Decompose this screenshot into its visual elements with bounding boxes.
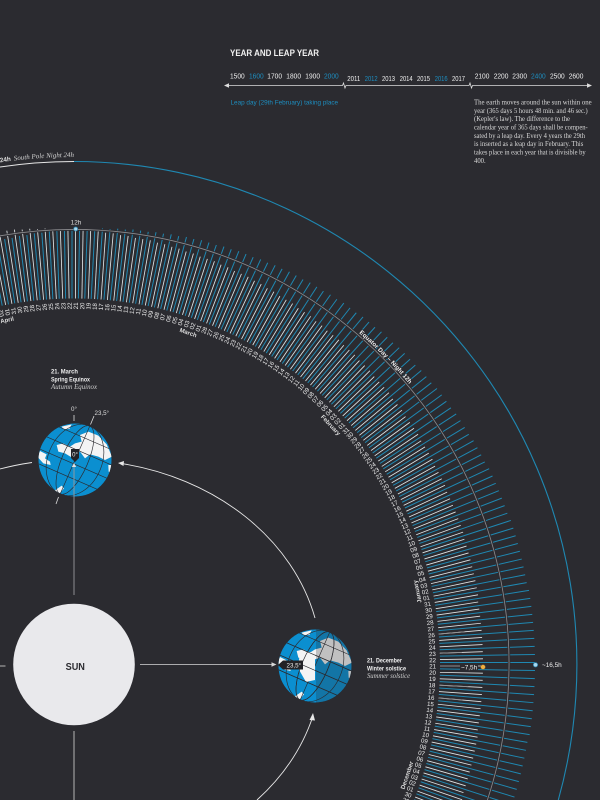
day and night length bars with date labels: 03: [329, 412, 339, 422]
day and night length bars with date labels: 16: [104, 303, 112, 311]
March caption: Autumn Equinox: [50, 383, 98, 391]
March caption: 21. March: [51, 368, 78, 376]
explanatory paragraph: calendar year of 365 days shall be compen-: [474, 124, 588, 132]
day and night length bars with date labels: 03: [183, 319, 192, 329]
day and night length bars with date labels: 05: [171, 316, 180, 325]
day and night length bars with date labels: 10: [422, 731, 430, 740]
day and night length bars with date labels: 21: [429, 664, 437, 670]
December caption: Winter solstice: [367, 665, 406, 672]
day and night length bars with date labels: 20: [245, 347, 255, 357]
day and night length bars with date labels: 12: [129, 306, 137, 315]
centuries left: 1700: [267, 74, 282, 80]
day and night length bars with date labels: [0, 228, 535, 800]
centuries left: 1900: [305, 74, 320, 80]
equator ring with label: [0, 228, 510, 800]
extra land on day side: [298, 652, 315, 682]
day and night length bars with date labels: 14: [116, 304, 124, 313]
day and night length bars with date labels: 20: [79, 302, 86, 309]
day and night length bars with date labels: 01: [337, 421, 347, 431]
month labels: April: [0, 317, 15, 325]
day and night length bars with date labels: 09: [410, 546, 419, 555]
day and night length bars with date labels: 26: [212, 330, 221, 340]
timeline arrow: [224, 83, 592, 88]
explanatory paragraph: [474, 98, 592, 165]
centuries right: 2400: [531, 74, 546, 80]
day and night length bars with date labels: 24: [54, 302, 61, 310]
day and night length bars with date labels: 23: [429, 651, 437, 658]
years middle: 2017: [452, 76, 465, 83]
day and night length bars with date labels: 04: [418, 576, 427, 584]
day and night length bars with date labels: 30: [403, 791, 413, 800]
centuries right: 2600: [569, 74, 583, 80]
day and night length bars with date labels: 29: [426, 613, 434, 621]
day and night length bars with date labels: 23: [371, 466, 381, 476]
day and night length bars with date labels: 07: [413, 558, 423, 566]
day and night length bars with date labels: 21: [240, 344, 250, 354]
day and night length bars with date labels: 28: [426, 619, 435, 627]
day and night length bars with date labels: 06: [415, 564, 424, 572]
day and night length bars with date labels: 13: [122, 305, 130, 314]
month labels: [0, 317, 424, 790]
day and night length bars with date labels: 22: [234, 341, 244, 351]
December caption: 21. December: [367, 657, 402, 664]
day and night length bars with date labels: 27: [427, 626, 435, 633]
day and night length bars with date labels: 12: [424, 719, 432, 727]
day and night length bars with date labels: 06: [416, 755, 425, 764]
day and night length bars with date labels: 29: [349, 436, 360, 446]
day and night length bars with date labels: 22: [67, 302, 74, 309]
day and night length bars with date labels: 30: [16, 305, 24, 314]
day and night length bars with date labels: 11: [423, 725, 431, 733]
day and night length bars with date labels: 15: [427, 701, 435, 708]
orbit arrows: [0, 461, 315, 800]
day and night length bars with date labels: 05: [417, 570, 426, 578]
centuries right: [475, 74, 583, 80]
day and night length bars with date labels: 02: [189, 321, 198, 331]
day and night length bars with date labels: 30: [345, 431, 356, 441]
day and night length bars with date labels: 23: [229, 338, 238, 348]
sun rays and axes: [0, 662, 276, 800]
centuries left: [230, 74, 339, 80]
explanatory paragraph: 400.: [474, 157, 486, 165]
day and night length bars with date labels: 28: [353, 440, 363, 451]
day and night length bars with date labels: 13: [282, 371, 292, 381]
centuries left: 1600: [249, 74, 264, 80]
explanatory paragraph: is inserted as a leap day in February. This: [474, 140, 584, 148]
day and night length bars with date labels: 01: [423, 594, 431, 603]
day and night length bars with date labels: 18: [428, 682, 436, 689]
centuries right: 2200: [494, 74, 508, 80]
December caption: [367, 657, 410, 680]
day and night length bars with date labels: 22: [429, 657, 437, 664]
day and night length bars with date labels: 01: [195, 323, 204, 333]
years middle: 2015: [417, 76, 430, 83]
centuries left: 1500: [230, 74, 245, 80]
zero degree tag: 0°: [72, 452, 78, 458]
day and night length bars with date labels: 06: [165, 314, 174, 323]
day and night length bars with date labels: 17: [428, 688, 436, 696]
explanatory paragraph: takes place in each year that is divisible by: [474, 148, 586, 156]
equator ring with label: Equator Day – Night 12h: [358, 329, 412, 384]
day and night length bars with date labels: 18: [92, 302, 99, 310]
day and night length bars with date labels: 17: [390, 499, 400, 509]
day and night length bars with date labels: 04: [412, 767, 421, 776]
zero degree tag: [71, 449, 79, 467]
day and night length bars with date labels: 15: [396, 510, 405, 520]
day and night length bars with date labels: 10: [141, 308, 149, 317]
day and night length bars with date labels: 12: [403, 528, 412, 537]
day and night length bars with date labels: 01: [406, 785, 415, 794]
day and night length bars with date labels: 25: [364, 456, 374, 466]
years middle: 2013: [382, 76, 395, 83]
day and night length bars with date labels: 18: [256, 353, 266, 363]
day and night length bars with date labels: 16: [267, 360, 277, 370]
month labels: March: [179, 328, 198, 339]
day and night length bars with date labels: 03: [410, 773, 419, 782]
angle labels: [71, 406, 110, 417]
outer ring: polar day and night: [0, 152, 578, 800]
centuries left: 2000: [324, 74, 339, 80]
day and night length bars with date labels: 19: [251, 350, 261, 360]
day and night length bars with date labels: 26: [428, 632, 436, 640]
sun: SUN: [66, 662, 85, 673]
day and night length bars with date labels: 10: [297, 382, 307, 392]
explanatory paragraph: (Kepler's law). The difference to the: [474, 115, 570, 123]
day and night length bars with date labels: 16: [427, 694, 435, 702]
day and night length bars with date labels: 08: [153, 311, 161, 320]
heading: YEAR AND LEAP YEAR: [230, 48, 319, 58]
years middle: 2011: [347, 76, 360, 83]
day and night length bars with date labels: 19: [429, 676, 436, 683]
day and night length bars with date labels: 13: [401, 522, 410, 531]
day and night length bars with date labels: 21: [73, 302, 80, 309]
day and night length bars with date labels: 05: [320, 403, 330, 413]
day and night length bars with date labels: 11: [406, 534, 415, 543]
marker: shortest day: [460, 664, 485, 671]
day and night length bars with date labels: 23: [60, 302, 68, 310]
December caption: Summer solstice: [367, 672, 410, 680]
day and night length bars with date labels: 04: [324, 407, 335, 418]
centuries right: 2500: [550, 74, 565, 80]
day and night length bars with date labels: 31: [341, 426, 352, 436]
day and night length bars with date labels: 24: [368, 461, 378, 471]
day and night length bars with date labels: 02: [333, 416, 343, 427]
day and night length bars with date labels: 10: [407, 540, 417, 549]
day and night length bars with date labels: 08: [419, 743, 428, 752]
re-drawn grid over day side land: [278, 632, 351, 700]
sun ray to March earth: [73, 466, 75, 595]
years middle: 2012: [365, 76, 378, 83]
day and night length bars with date labels: 28: [200, 326, 210, 335]
day and night length bars with date labels: 08: [306, 390, 316, 400]
leap year timeline section: [224, 48, 592, 165]
years middle: 2016: [435, 76, 448, 83]
marker: 12h equinox: 12h: [71, 220, 82, 226]
explanatory paragraph: year (365 days 5 hours 48 min. and 46 sec.): [474, 107, 588, 115]
angle tag: 23,5°: [286, 662, 302, 669]
day and night length bars with date labels: 02: [421, 588, 430, 597]
day and night length bars with date labels: 24: [429, 645, 436, 652]
angle labels: 23,5°: [94, 410, 110, 417]
day and night length bars with date labels: 20: [429, 670, 437, 677]
earth at December solstice: [278, 630, 352, 702]
day and night length bars with date labels: 20: [381, 482, 391, 492]
day and night length bars with date labels: 09: [147, 310, 155, 318]
day and night length bars with date labels: 21: [378, 477, 388, 487]
earth at March equinox: [25, 406, 125, 595]
centuries left: 1800: [286, 74, 301, 80]
day and night length bars with date labels: 03: [420, 582, 429, 590]
day and night length bars with date labels: 28: [29, 304, 37, 312]
day and night length bars with date labels: 27: [357, 445, 367, 456]
day and night length bars with date labels: 12: [287, 374, 297, 384]
years middle: 2014: [400, 76, 413, 83]
month labels: December: [401, 760, 416, 790]
day and night length bars with date labels: 09: [302, 386, 312, 396]
day and night length bars with date labels: 27: [206, 328, 215, 337]
day and night length bars with date labels: 17: [261, 356, 271, 366]
day and night length bars with date labels: 07: [311, 394, 321, 405]
centuries right: 2300: [512, 74, 527, 80]
day and night length bars with date labels: 25: [428, 638, 436, 646]
day and night length bars with date labels: 05: [414, 761, 423, 770]
day and night length bars with date labels: 25: [218, 333, 227, 342]
day and night length bars with date labels: 19: [384, 488, 394, 498]
day and night length bars with date labels: 25: [48, 302, 55, 310]
day and night length bars with date labels: 31: [10, 306, 18, 315]
day and night length bars with date labels: 31: [424, 601, 432, 609]
day and night length bars with date labels: 26: [41, 303, 49, 311]
day and night length bars with date labels: 26: [361, 451, 371, 461]
day and night length bars with date labels: 04: [177, 317, 186, 327]
day and night length bars with date labels: 02: [408, 779, 417, 788]
day and night length bars with date labels: 11: [292, 378, 302, 388]
day and night length bars with date labels: 11: [135, 307, 143, 315]
day and night length bars with date labels: 06: [316, 399, 326, 409]
day and night length bars with date labels: 14: [277, 367, 287, 377]
night shading: [316, 630, 352, 702]
day and night length bars with date labels: 08: [412, 551, 421, 560]
day and night length bars with date labels: 30: [425, 607, 433, 615]
day and night length bars with date labels: 13: [425, 713, 433, 721]
day and night length bars with date labels: 24: [223, 335, 233, 345]
month labels: January: [413, 579, 424, 603]
day and night length bars with date labels: 14: [426, 707, 434, 715]
day and night length bars with date labels: 15: [272, 363, 282, 373]
day and night length bars with date labels: 17: [98, 303, 105, 311]
day and night length bars with date labels: 09: [420, 737, 429, 746]
day and night length bars with date labels: 16: [393, 505, 403, 514]
explanatory paragraph: sated by a leap day. Every 4 years the 29th: [474, 132, 585, 140]
day and night length bars with date labels: 07: [159, 312, 168, 321]
month labels: February: [319, 414, 341, 438]
day and night length bars with date labels: 29: [23, 305, 31, 313]
day and night length bars with date labels: 15: [110, 304, 118, 312]
day and night length bars with date labels: 27: [35, 303, 43, 311]
day and night length bars with date labels: 01: [4, 307, 12, 316]
day and night length bars with date labels: 14: [398, 516, 408, 526]
marker: longest night: ~16,5h: [542, 662, 562, 669]
centuries right: 2100: [475, 74, 489, 80]
marker: shortest day: ~7,5h: [461, 664, 478, 671]
marker: 12h equinox: [71, 220, 82, 231]
axis ticks: [56, 415, 94, 504]
marker: longest night: [533, 662, 562, 669]
day and night length bars with date labels: 22: [375, 471, 385, 481]
March caption: [50, 368, 98, 391]
March caption: Spring Equinox: [51, 376, 90, 384]
sun: [13, 604, 135, 725]
years middle: [347, 76, 465, 83]
day and night length bars with date labels: 07: [417, 749, 426, 758]
day and night length bars with date labels: 18: [387, 493, 397, 503]
day and night length bars with date labels: 19: [85, 302, 93, 310]
angle labels: 0°: [71, 406, 77, 413]
explanatory paragraph: The earth moves around the sun within one: [474, 98, 592, 106]
leap day legend: Leap day (29th February) taking place: [230, 100, 338, 106]
